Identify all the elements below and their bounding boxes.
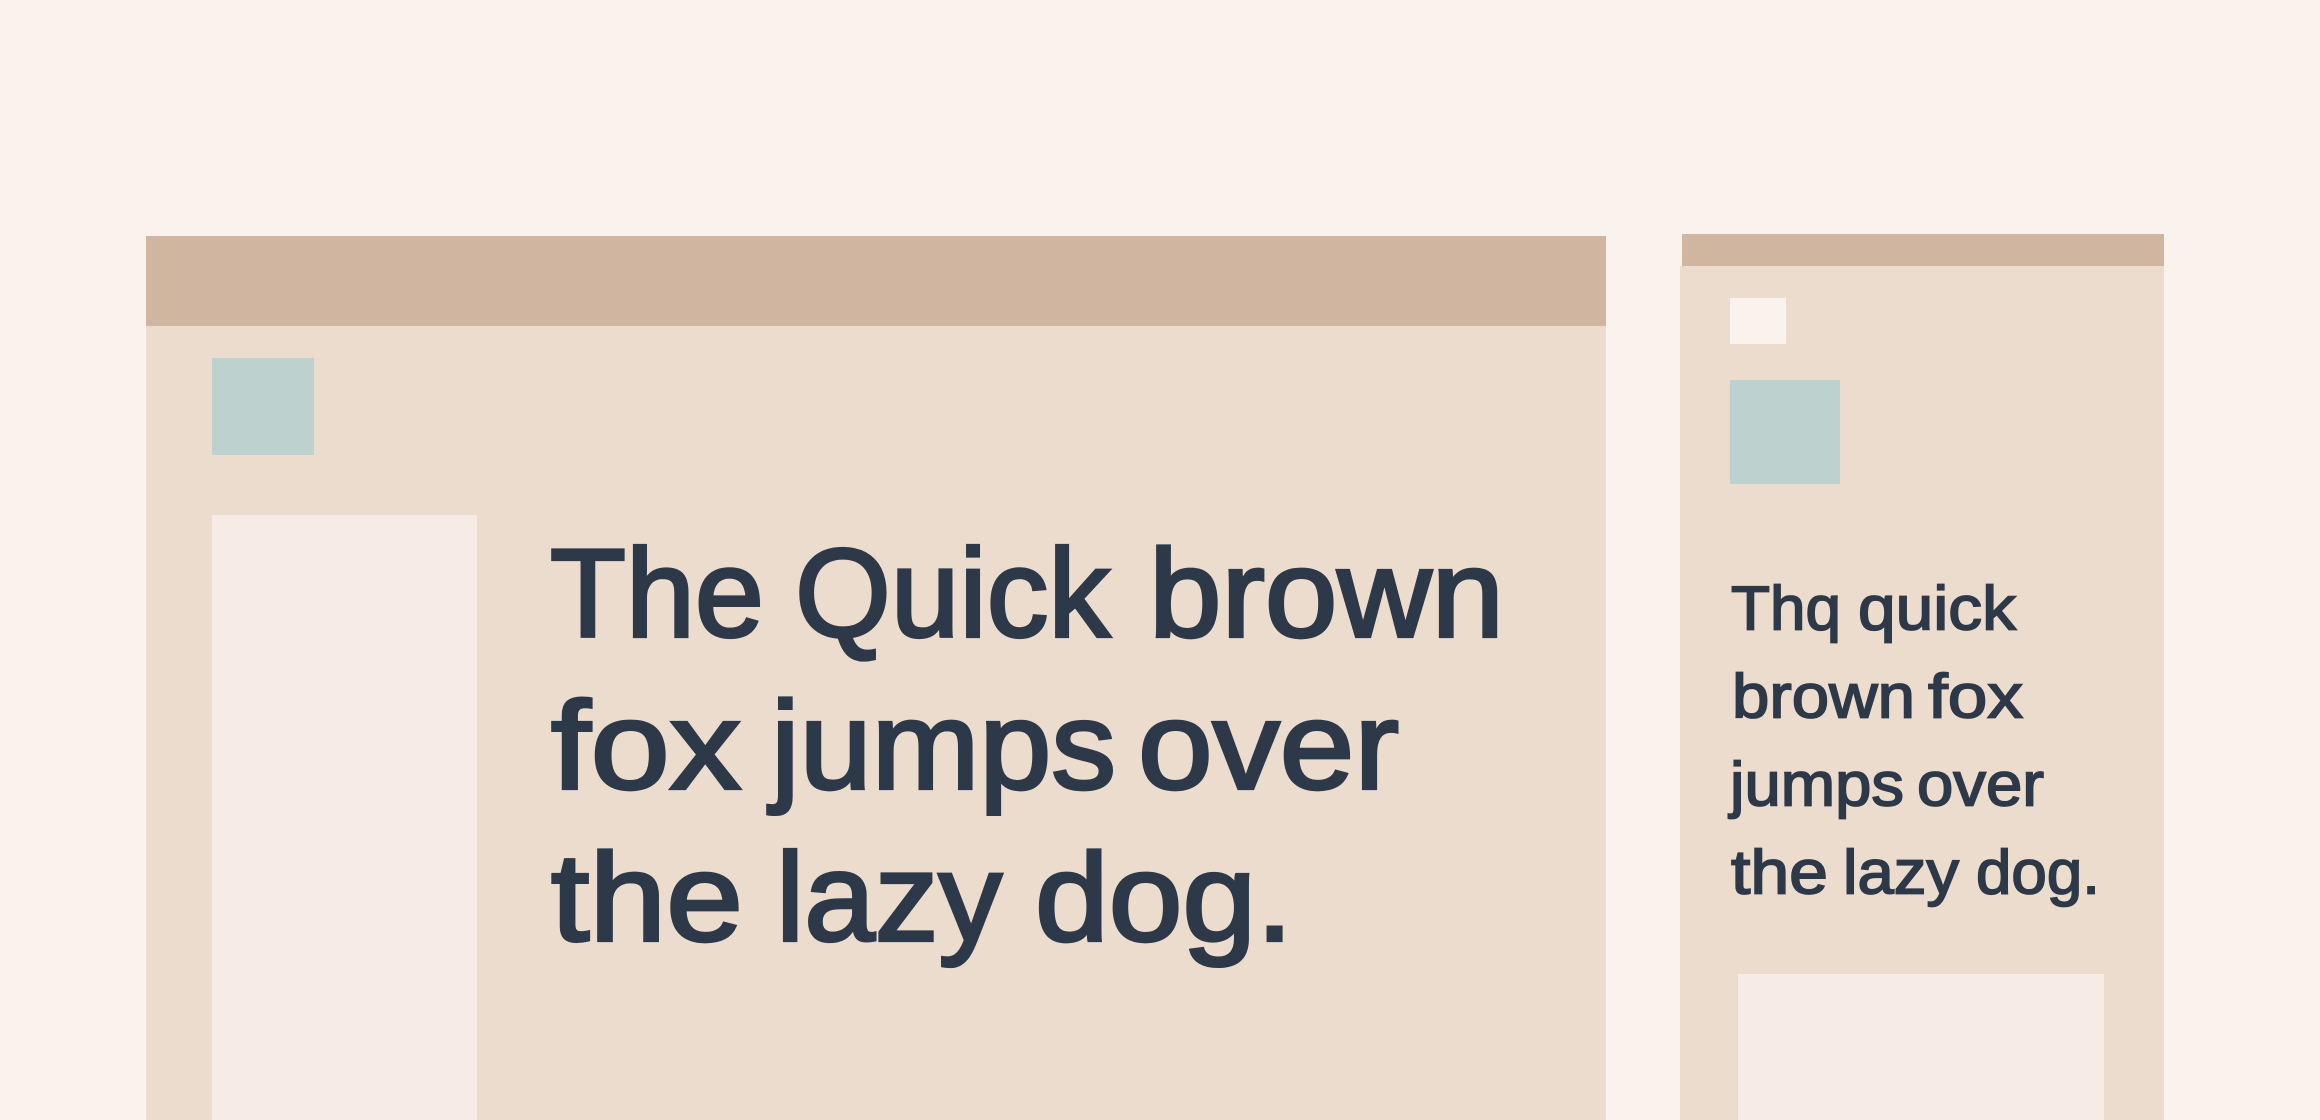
main card heading text: fox <box>551 676 741 816</box>
side card small light square <box>1730 298 1786 344</box>
main card heading text: The <box>550 524 764 664</box>
side card body text: Thq <box>1731 574 1841 644</box>
main card heading text: brown <box>1149 524 1504 664</box>
main card pale sidebar <box>212 515 477 1120</box>
panel: side card <box>1680 234 2164 1120</box>
side card body text: dog. <box>1976 838 2100 908</box>
side card body text <box>1728 574 2100 908</box>
main card heading text: dog. <box>1035 828 1293 968</box>
side card body text: fox <box>1928 662 2023 732</box>
side card pale block <box>1738 974 2104 1120</box>
main card heading text: lazy <box>776 828 1003 968</box>
side card body text: lazy <box>1843 838 1959 908</box>
side card teal square <box>1730 380 1840 484</box>
main card heading text <box>550 524 1504 968</box>
side card body <box>1680 266 2164 1120</box>
main card heading text: Quick <box>795 524 1110 664</box>
main card teal square <box>212 358 314 455</box>
side card body text: over <box>1917 750 2044 820</box>
main card heading text: the <box>551 828 743 968</box>
panel: main card <box>146 236 1606 1120</box>
main card header bar <box>146 236 1606 326</box>
side card body text: brown <box>1732 662 1915 732</box>
side card body text: jumps <box>1728 750 1904 820</box>
main card heading text: jumps <box>767 676 1116 816</box>
side card body text: quick <box>1858 574 2017 644</box>
side card body text: the <box>1731 838 1828 908</box>
side card header bar <box>1682 234 2164 266</box>
main card heading text: over <box>1138 676 1399 816</box>
main card body <box>146 236 1606 1120</box>
